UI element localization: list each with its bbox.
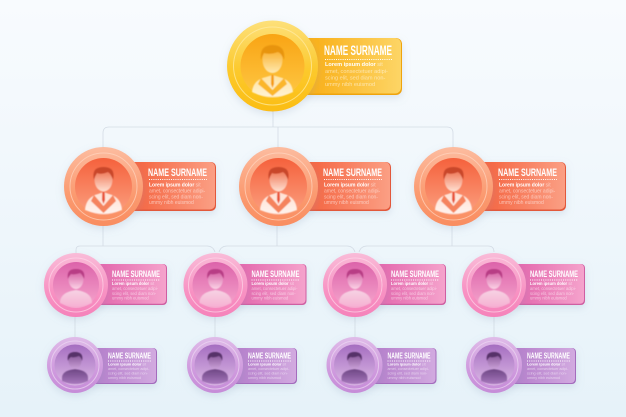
description: ummy nibh euismod — [499, 200, 544, 206]
description: Lorem ipsum dolor — [391, 281, 428, 286]
description: sit — [289, 281, 295, 286]
icon: person — [85, 167, 122, 214]
label panel — [128, 162, 216, 211]
node: staff 3 — [326, 337, 436, 393]
badge — [239, 147, 318, 226]
description: scing elit, sed diam non- — [149, 194, 203, 200]
description: scing elit, sed diam non- — [108, 372, 149, 376]
badge — [47, 337, 103, 393]
description: amet, consectetuer adipi- — [388, 367, 430, 371]
node: staff 2 — [187, 337, 297, 393]
name: NAME SURNAME — [498, 167, 557, 179]
badge — [227, 20, 318, 112]
connector lines — [75, 108, 494, 338]
description: Lorem ipsum dolor — [248, 362, 282, 366]
node: staff 1 — [47, 337, 157, 393]
node: team lead 4 — [462, 253, 585, 317]
description: sit — [141, 362, 146, 366]
name: NAME SURNAME — [252, 269, 300, 279]
name: NAME SURNAME — [323, 167, 382, 179]
description: sit — [560, 362, 565, 366]
description: amet, consectetuer adipi- — [324, 188, 380, 194]
description: Lorem ipsum dolor — [499, 182, 544, 188]
node: staff 4 — [466, 337, 576, 393]
label panel — [374, 264, 446, 305]
description: amet, consectetuer adipi- — [149, 188, 205, 194]
description: ummy nibh euismod — [388, 376, 420, 380]
description: sit — [281, 362, 286, 366]
name: NAME SURNAME — [324, 42, 392, 58]
description: sit — [567, 281, 573, 286]
label panel — [478, 162, 566, 211]
description: ummy nibh euismod — [149, 200, 194, 206]
description: ummy nibh euismod — [324, 200, 369, 206]
name: NAME SURNAME — [112, 269, 160, 279]
node: team lead 2 — [184, 253, 306, 317]
description: amet, consectetuer adipi- — [248, 367, 290, 371]
label panel — [234, 264, 306, 305]
node: top manager — [227, 20, 402, 112]
node: team lead 1 — [44, 253, 167, 317]
label panel — [370, 348, 436, 384]
description: amet, consectetuer adipi- — [499, 188, 555, 194]
description: Lorem ipsum dolor — [527, 362, 561, 366]
description: Lorem ipsum dolor — [149, 182, 194, 188]
description: Lorem ipsum dolor — [388, 362, 421, 366]
label panel — [509, 348, 576, 384]
icon: person — [260, 167, 297, 214]
description: ummy nibh euismod — [112, 296, 149, 300]
description: scing elit, sed diam non- — [388, 372, 428, 376]
description: ummy nibh euismod — [248, 376, 281, 380]
node: manager 1 — [64, 147, 216, 226]
description: sit — [369, 182, 376, 188]
description: amet, consectetuer adipi- — [112, 286, 159, 291]
label panel — [300, 38, 402, 95]
icon: person — [342, 352, 368, 384]
badge — [44, 253, 108, 317]
icon: person — [202, 352, 228, 384]
description: ummy nibh euismod — [391, 296, 428, 300]
description: amet, consectetuer adipi- — [325, 69, 388, 75]
name: NAME SURNAME — [391, 269, 439, 279]
description: Lorem ipsum dolor — [530, 281, 567, 286]
node: manager 3 — [414, 147, 566, 226]
description: Lorem ipsum dolor — [325, 62, 376, 68]
description: scing elit, sed diam non- — [391, 291, 436, 296]
description: scing elit, sed diam non- — [325, 76, 385, 82]
description: scing elit, sed diam non- — [527, 372, 568, 376]
description: scing elit, sed diam non- — [112, 291, 157, 296]
description: scing elit, sed diam non- — [530, 291, 575, 296]
description: sit — [544, 182, 551, 188]
name: NAME SURNAME — [527, 350, 570, 360]
label panel — [303, 162, 391, 211]
name: NAME SURNAME — [248, 350, 291, 360]
description: scing elit, sed diam non- — [248, 372, 289, 376]
name: NAME SURNAME — [148, 167, 207, 179]
description: sit — [194, 182, 201, 188]
description: amet, consectetuer adipi- — [391, 286, 438, 291]
label panel — [95, 264, 167, 305]
description: ummy nibh euismod — [252, 296, 289, 300]
badge — [64, 147, 143, 226]
description: amet, consectetuer adipi- — [527, 367, 569, 371]
badge — [466, 337, 522, 393]
icon: person — [481, 352, 507, 384]
description: scing elit, sed diam non- — [324, 194, 378, 200]
label panel — [230, 348, 297, 384]
description: ummy nibh euismod — [108, 376, 141, 380]
icon: person — [200, 269, 232, 307]
description: Lorem ipsum dolor — [324, 182, 369, 188]
description: amet, consectetuer adipi- — [530, 286, 577, 291]
description: scing elit, sed diam non- — [499, 194, 553, 200]
description: scing elit, sed diam non- — [252, 291, 296, 296]
description: amet, consectetuer adipi- — [252, 286, 298, 291]
badge — [184, 253, 248, 317]
node: team lead 3 — [323, 253, 446, 317]
label panel — [90, 348, 157, 384]
description: ummy nibh euismod — [527, 376, 560, 380]
label panel — [513, 264, 585, 305]
description: sit — [376, 62, 383, 68]
description: amet, consectetuer adipi- — [108, 367, 150, 371]
description: ummy nibh euismod — [530, 296, 567, 300]
badge — [187, 337, 243, 393]
icon: person — [252, 45, 293, 97]
badge — [414, 147, 493, 226]
icon: person — [62, 352, 88, 384]
icon: person — [60, 269, 92, 307]
description: Lorem ipsum dolor — [112, 281, 149, 286]
description: ummy nibh euismod — [325, 82, 375, 88]
name: NAME SURNAME — [108, 350, 151, 360]
description: sit — [149, 281, 155, 286]
name: NAME SURNAME — [388, 350, 431, 360]
icon: person — [339, 269, 371, 307]
name: NAME SURNAME — [530, 269, 578, 279]
icon: person — [478, 269, 510, 307]
badge — [326, 337, 382, 393]
description: Lorem ipsum dolor — [252, 281, 289, 286]
description: sit — [421, 362, 426, 366]
icon: person — [435, 167, 472, 214]
badge — [462, 253, 526, 317]
node: manager 2 — [239, 147, 391, 226]
description: Lorem ipsum dolor — [108, 362, 142, 366]
badge — [323, 253, 387, 317]
description: sit — [428, 281, 434, 286]
